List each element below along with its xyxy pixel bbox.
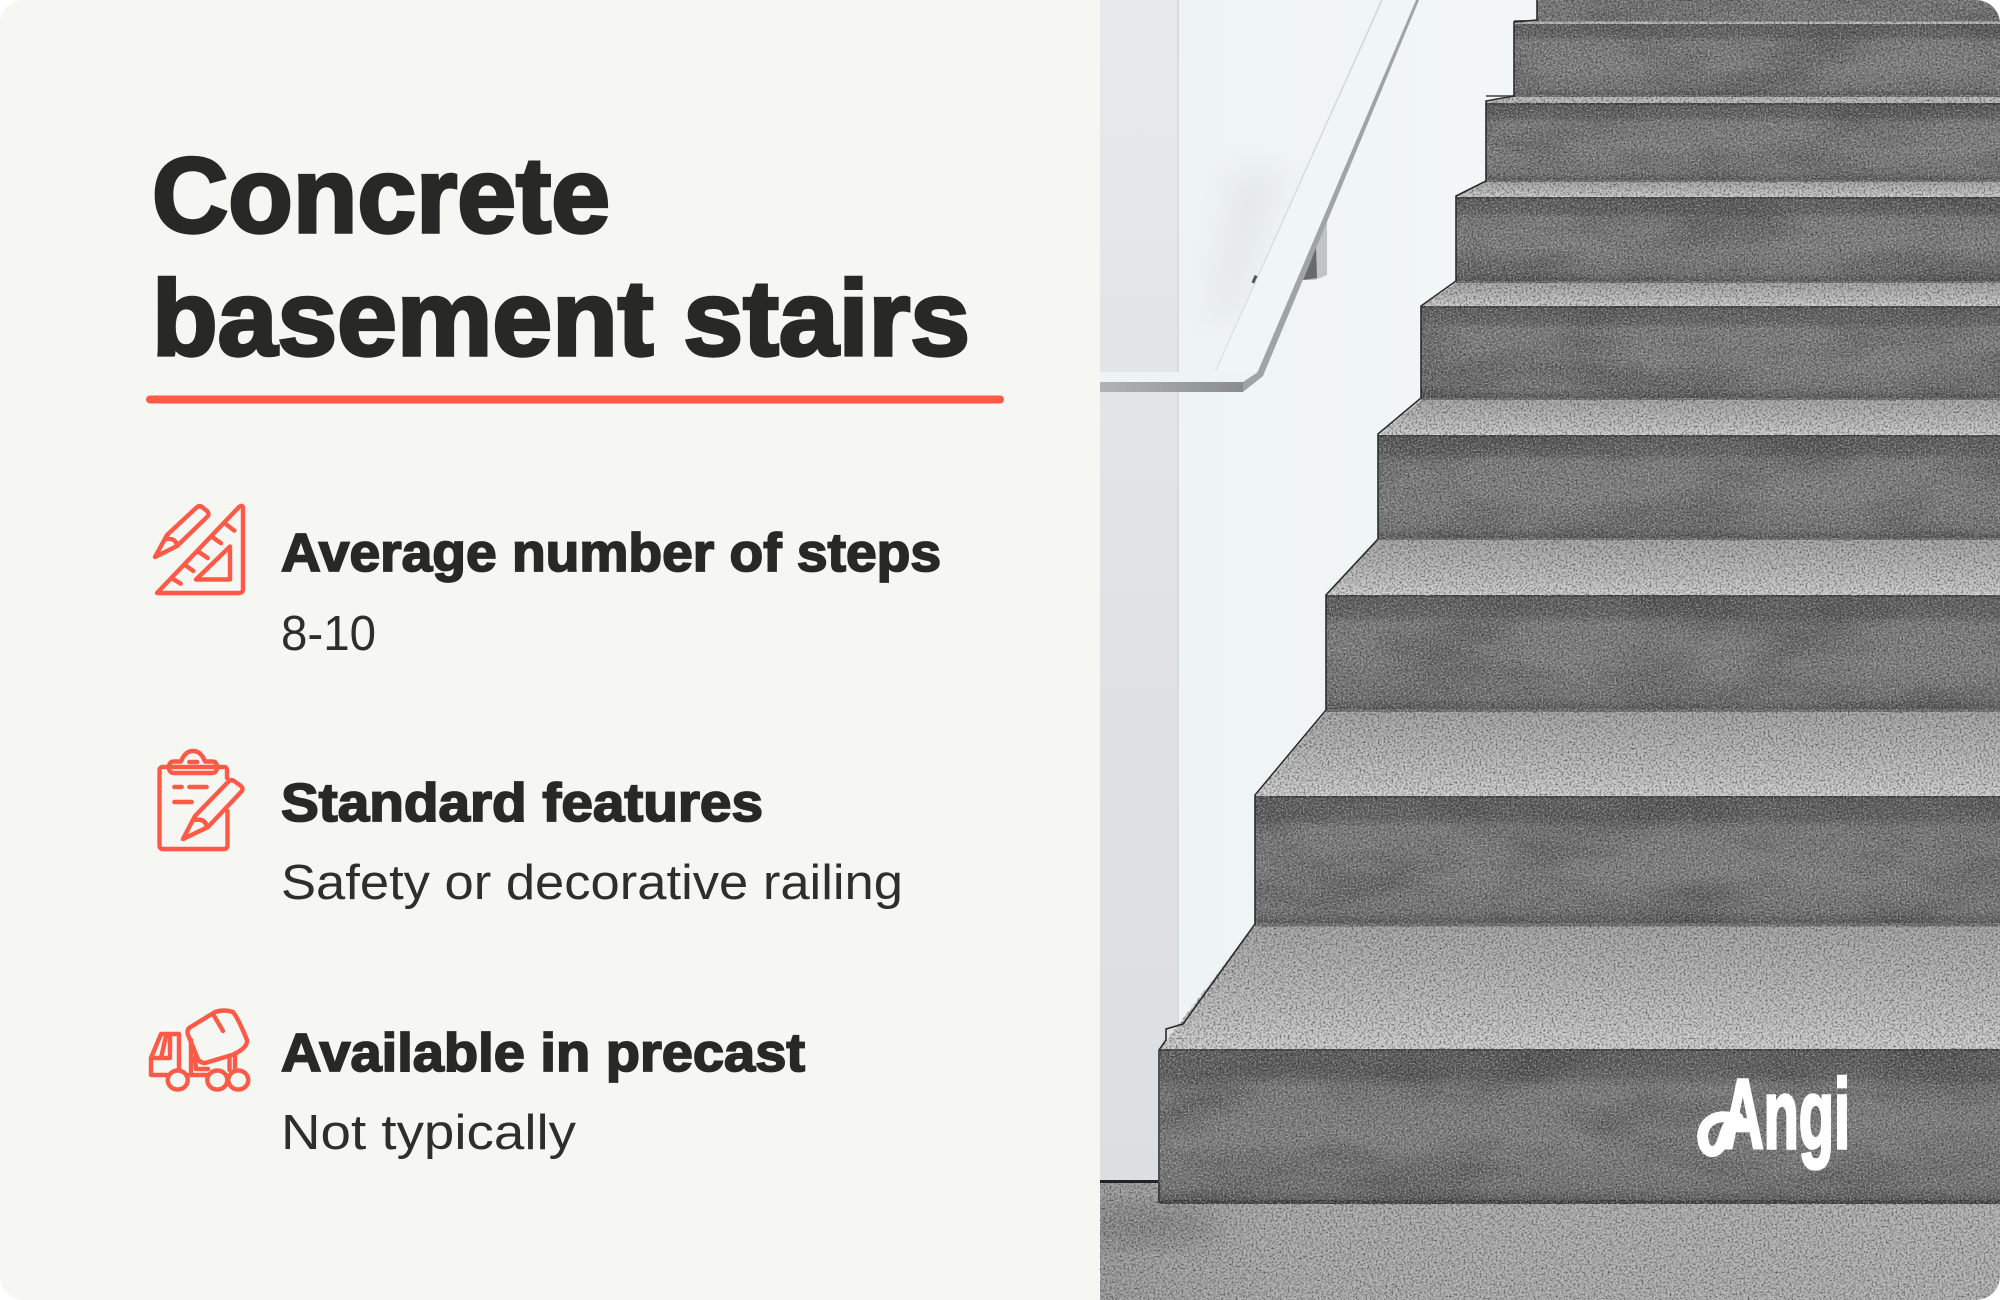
title xyxy=(154,156,968,358)
icon: clipboard and pencil xyxy=(160,751,242,849)
item: standard features xyxy=(160,751,903,910)
handrail xyxy=(1100,0,1419,392)
concrete texture xyxy=(1100,0,2000,1300)
icon: cement mixer truck xyxy=(151,1010,248,1090)
icon: ruler and pencil xyxy=(155,506,243,593)
face mottling xyxy=(1160,0,2000,1200)
value: Safety or decorative railing xyxy=(281,856,903,910)
title: Concrete xyxy=(152,135,610,255)
photo: concrete staircase xyxy=(1080,0,2000,1300)
stairs: faces xyxy=(1160,0,2000,1203)
heading: Standard features xyxy=(281,773,763,833)
white wall xyxy=(1179,0,1536,1024)
item: available in precast xyxy=(151,1010,805,1160)
heading: Average number of steps xyxy=(281,523,941,583)
value: 8-10 xyxy=(281,607,376,661)
panel: text background xyxy=(0,0,1100,1300)
wall column xyxy=(1100,0,1180,1190)
stairs: treads xyxy=(1160,20,2000,1204)
stair wall edge xyxy=(1159,0,1537,1203)
title underline xyxy=(146,396,1004,404)
floor xyxy=(1100,1183,2000,1300)
logo: Angi: Angi xyxy=(1722,1059,1850,1169)
logo: Angi xyxy=(1697,1074,1847,1171)
value: Not typically xyxy=(281,1106,577,1160)
heading: Available in precast xyxy=(281,1023,805,1083)
item: average number of steps xyxy=(155,506,941,661)
title: basement stairs xyxy=(152,258,970,378)
